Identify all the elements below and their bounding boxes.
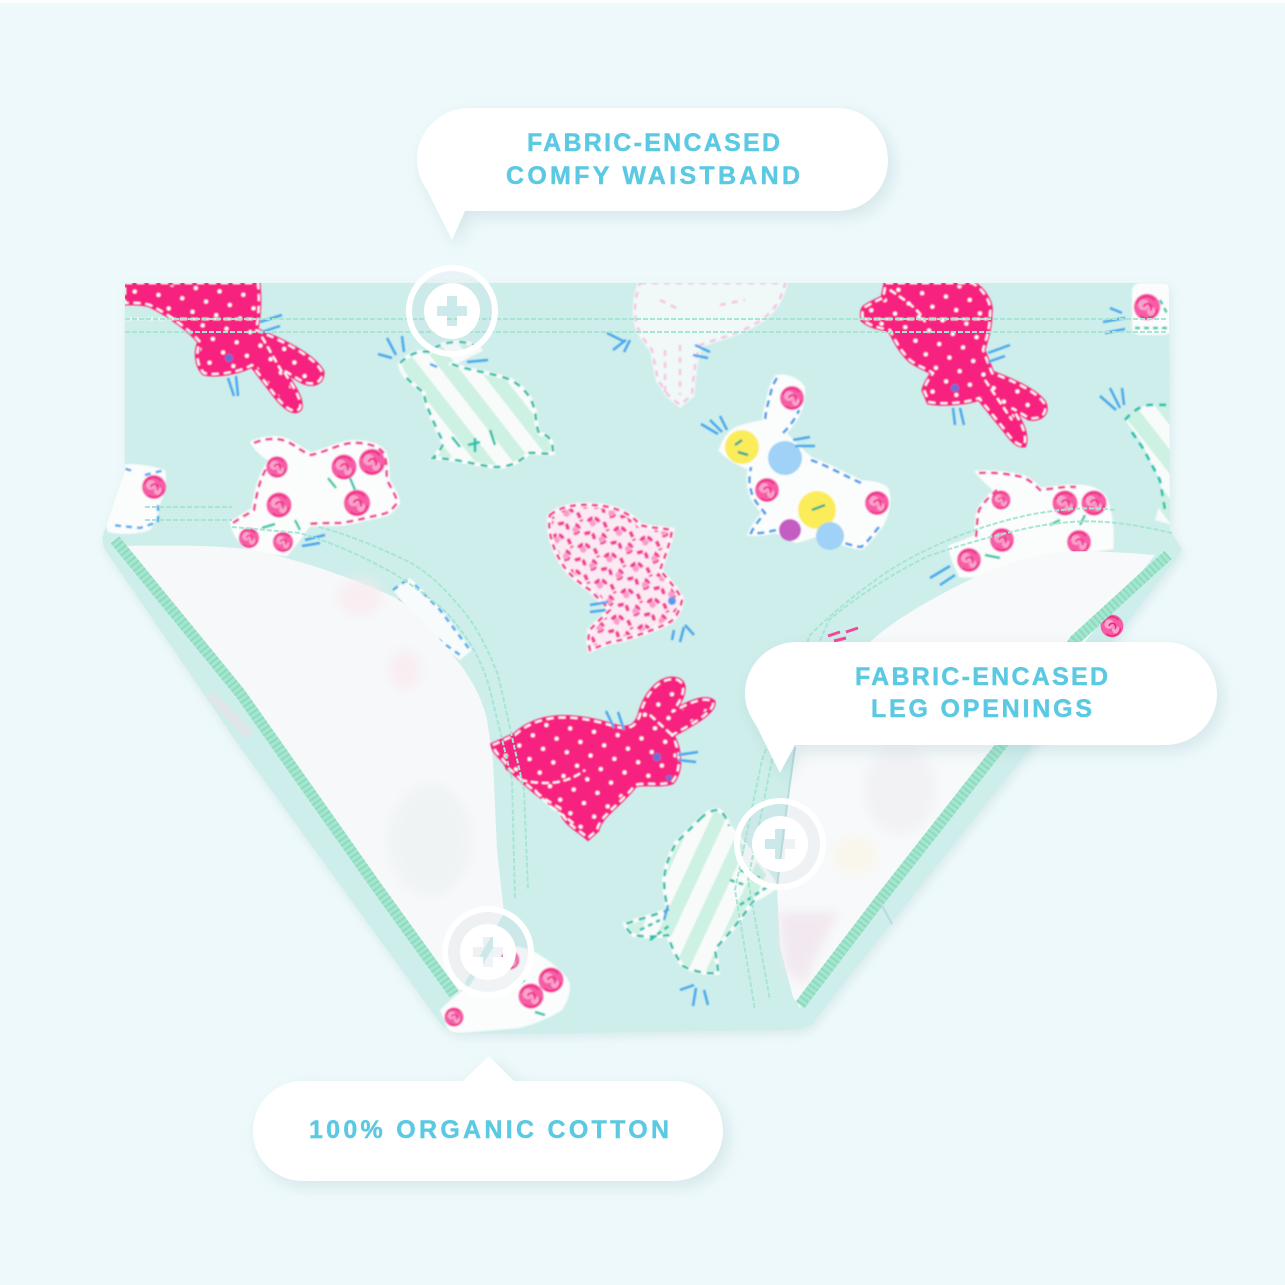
bunny: solid magenta, top right — [862, 283, 1045, 445]
bunny: floral white, right waistband — [930, 473, 1111, 585]
callout: 100% organic cotton: 100% ORGANIC COTTON — [309, 1116, 669, 1144]
hotspot: waistband marker — [409, 268, 495, 354]
stitching lines — [125, 319, 1172, 1010]
callout: 100% organic cotton — [253, 1056, 723, 1181]
bunny: leopard print, centre — [549, 505, 694, 650]
callout: fabric-encased leg openings — [745, 642, 1217, 773]
callout: fabric-encased comfy waistband: COMFY WAISTBAND — [506, 162, 800, 190]
garment body fabric — [102, 283, 1182, 1034]
right leg overlock seam — [800, 555, 1168, 1005]
bunny: solid magenta, top left — [125, 283, 322, 411]
printed bunnies — [104, 283, 1172, 1034]
fold shadows — [777, 747, 892, 924]
bunny: pale white faded, top centre — [607, 283, 785, 405]
hotspot: leg opening marker — [737, 801, 823, 887]
bunny: floral, left edge — [104, 464, 166, 534]
bunny: floral with yellow roses, centre right — [701, 378, 889, 550]
callout: fabric-encased leg openings: FABRIC-ENCASED — [855, 663, 1108, 691]
bunny: striped teal dashed, upper left — [378, 336, 553, 467]
bunny: blue dashed on leg binding — [393, 578, 472, 660]
underwear garment — [102, 283, 1182, 1034]
callout: fabric-encased comfy waistband — [417, 108, 888, 240]
left leg opening: inner lining — [122, 545, 504, 992]
callout: fabric-encased leg openings: LEG OPENINGS — [871, 695, 1092, 723]
bunny: striped, right edge — [1100, 388, 1172, 525]
right leg opening: inner lining — [777, 551, 1155, 1008]
hotspot: organic cotton marker — [445, 909, 531, 995]
callout: fabric-encased comfy waistband: FABRIC-ENCASED — [527, 129, 780, 157]
bunny: floral, bottom left — [440, 945, 570, 1034]
bunny: floral white, left waistband — [233, 439, 397, 553]
bunny: striped teal dashed, bottom — [625, 810, 776, 1006]
left leg overlock seam — [115, 540, 454, 994]
bunny: floral, top right corner — [1103, 283, 1172, 335]
bunny: solid magenta, lower centre — [493, 679, 713, 838]
